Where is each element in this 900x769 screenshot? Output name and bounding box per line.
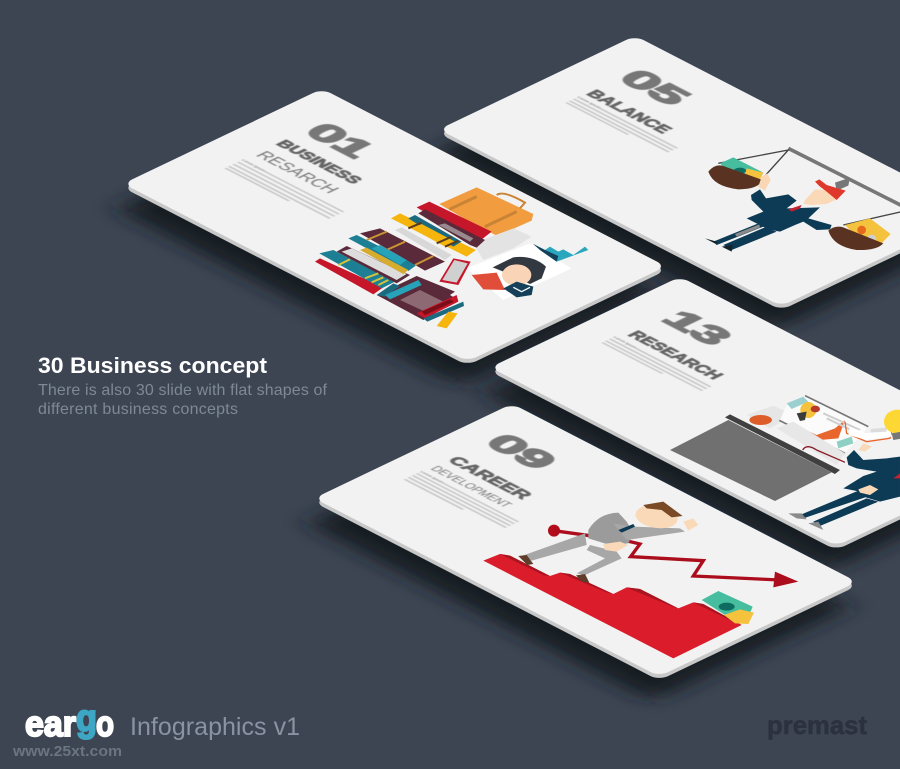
text block: 30 business concept: 30 Business concept	[38, 353, 268, 378]
text block: 30 business concept: There is also 30 slide with flat shapes of	[38, 382, 328, 399]
logo: eargo: g	[76, 698, 97, 740]
icon: stack of books	[315, 202, 492, 328]
icon: balance scale with businessman	[705, 148, 900, 252]
text: 09 career development heading	[405, 428, 609, 530]
text: infographics v1: Infographics v1	[130, 713, 300, 741]
text: 09 career development heading: Lorem Ipsum	[419, 470, 446, 484]
text: 09 career development heading: DEVELOPMENT	[427, 464, 516, 510]
text: 09 career development heading: 09	[477, 429, 567, 474]
text: 09 career development heading: CAREER	[443, 454, 537, 501]
chart: red stairs with rising arrow and businessman	[483, 502, 798, 658]
text: 05 balance heading: BALANCE	[582, 88, 677, 136]
text: 01 business research heading: 01	[296, 118, 385, 162]
text: 13 research heading: 13	[653, 306, 742, 350]
text block: 30 business concept	[38, 353, 328, 418]
text: 13 research heading	[602, 303, 782, 392]
text: 05 balance heading: Lorem Ipsum	[576, 96, 603, 109]
text: 01 business research heading: RESARCH	[251, 149, 344, 196]
text: 13 research heading: Lorem Ipsum	[612, 336, 639, 349]
logo: premast: premast	[767, 710, 867, 740]
icon: standing businessman	[788, 443, 900, 530]
text: 05 balance heading	[566, 64, 746, 154]
text: watermark url: www.25xt.com	[12, 743, 122, 760]
panel: card 01 business research	[116, 89, 666, 386]
logo: eargo	[25, 698, 114, 744]
icon: book, chart papers and light bulb	[670, 396, 900, 501]
panel: card 09 career development	[307, 404, 857, 701]
logo: eargo: o	[96, 703, 114, 744]
panel: card 05 balance	[432, 36, 900, 331]
text: 13 research heading: RESEARCH	[624, 328, 728, 382]
logo: eargo: ear	[25, 703, 76, 744]
panel: card 13 research	[483, 277, 900, 571]
text block: 30 business concept: different business concepts	[38, 401, 238, 418]
text: 01 business research heading	[225, 117, 433, 220]
text: 05 balance heading: 05	[610, 65, 700, 110]
text: 01 business research heading: Lorem Ipsum	[241, 159, 268, 172]
icon: suitcase and portrait	[439, 187, 588, 300]
text: 01 business research heading: BUSINESS	[272, 138, 366, 186]
